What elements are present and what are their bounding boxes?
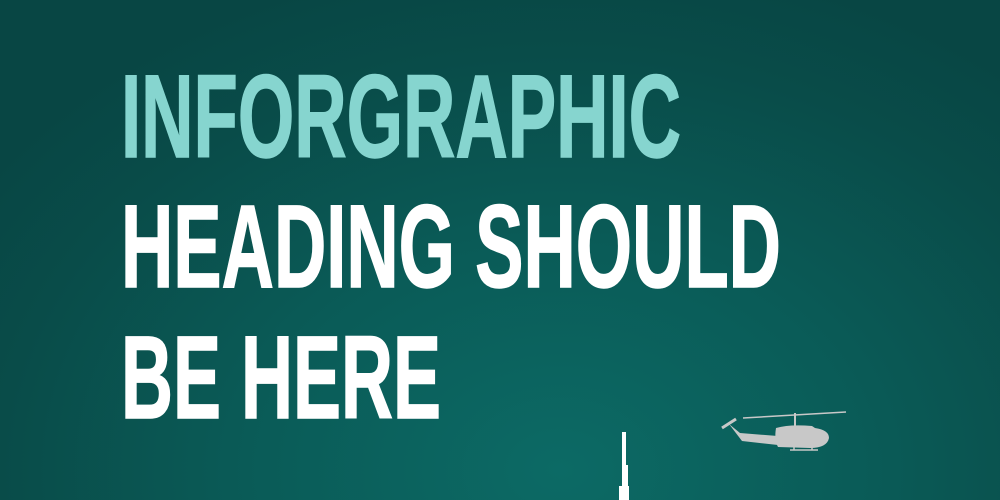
title line 3: BE HERE	[121, 312, 441, 444]
title	[121, 51, 781, 444]
icon: tower	[619, 432, 629, 500]
icon: helicopter	[722, 412, 846, 450]
